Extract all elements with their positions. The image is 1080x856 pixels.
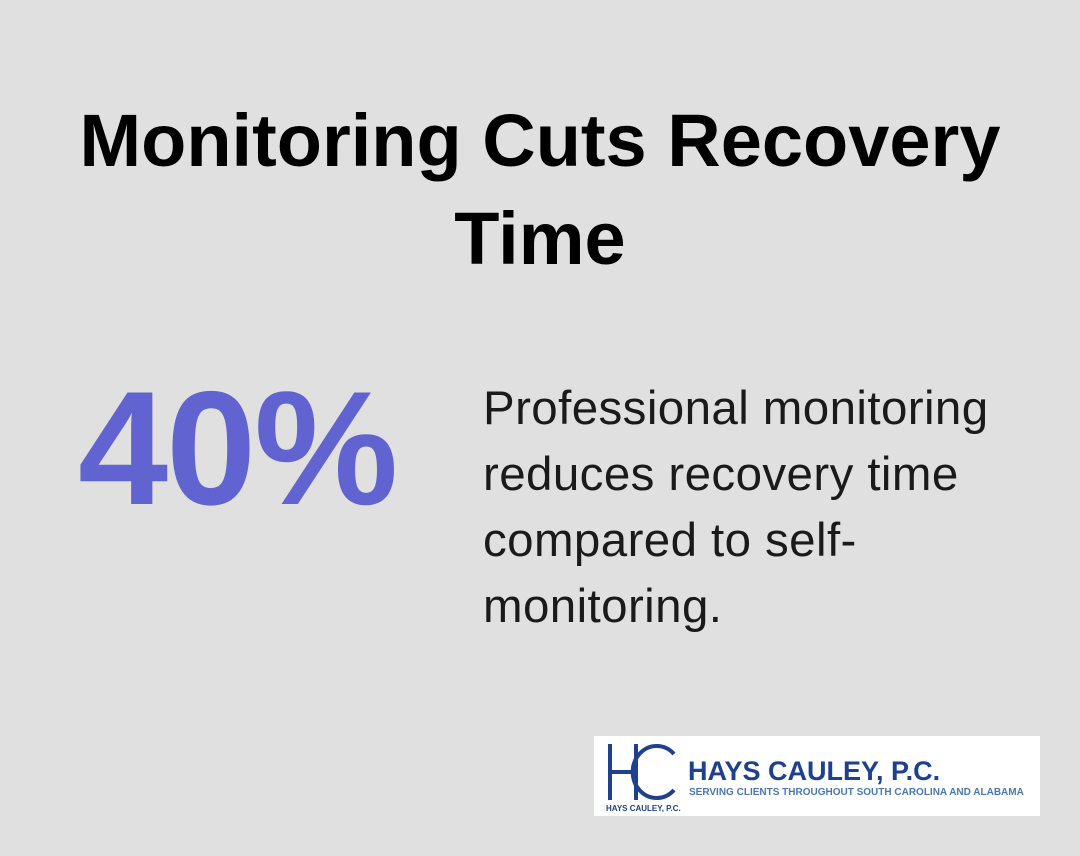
title (80, 99, 1000, 280)
description: Professional monitoring (483, 382, 989, 435)
description (483, 382, 989, 633)
description: reduces recovery time (483, 448, 959, 501)
title: Time (454, 197, 626, 280)
logo: SERVING CLIENTS THROUGHOUT SOUTH CAROLINA AND ALABAMA (689, 787, 1024, 798)
description: monitoring. (483, 580, 722, 633)
icon: HC monogram (608, 744, 676, 800)
title: Monitoring Cuts Recovery (80, 99, 1000, 182)
big stat: 40% (78, 358, 396, 539)
logo: HAYS CAULEY, P.C. (688, 756, 940, 786)
logo (594, 736, 1040, 816)
description: compared to self- (483, 514, 857, 567)
logo: HAYS CAULEY, P.C. (606, 804, 681, 813)
